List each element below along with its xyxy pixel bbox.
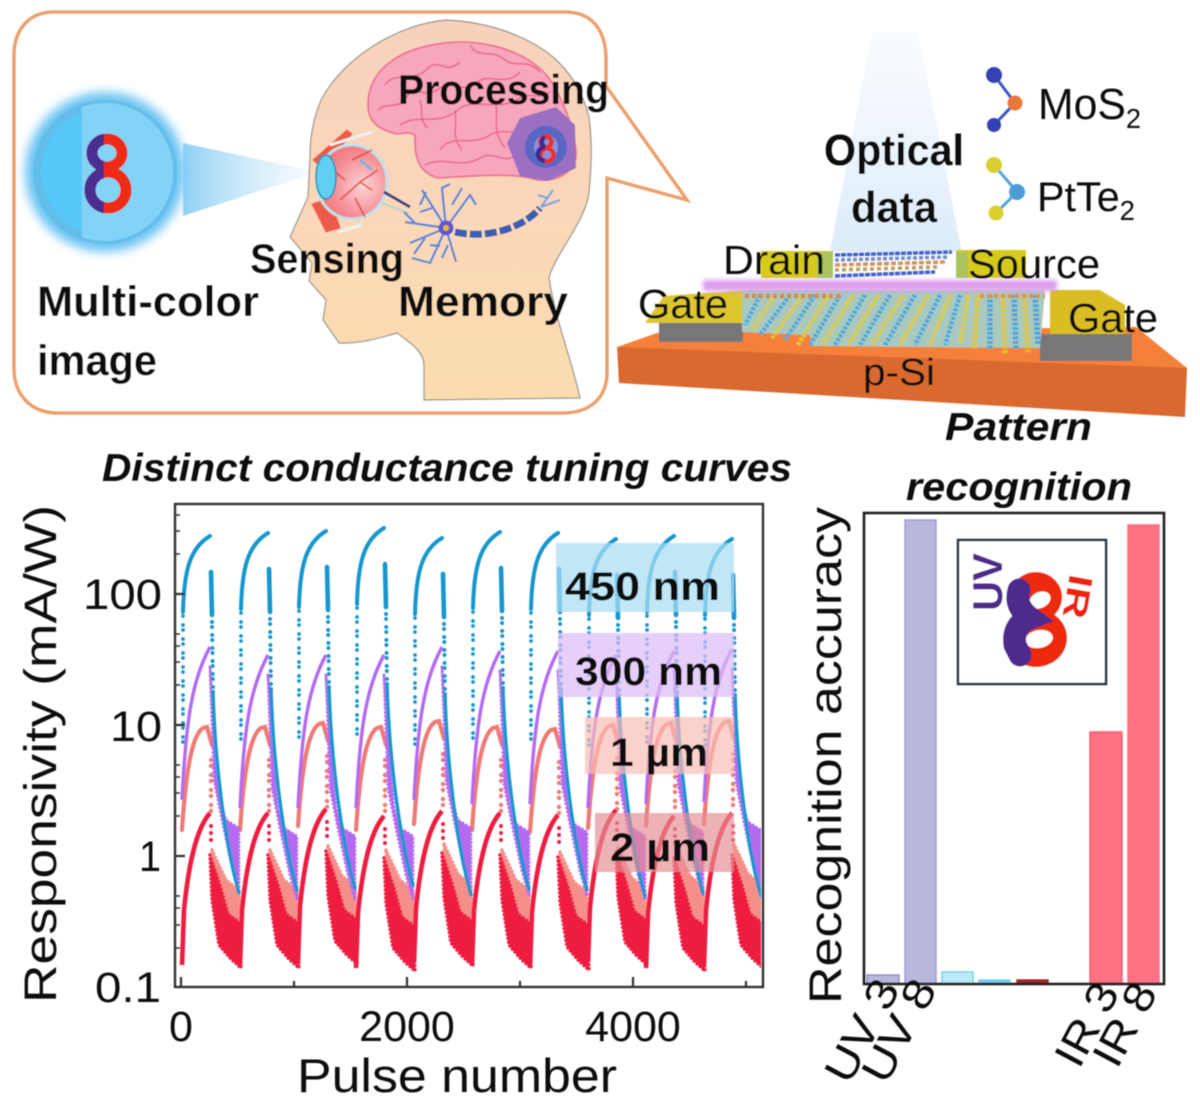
scatter series: salmon 1 um [182, 721, 763, 952]
label: Sensing: Sensing [250, 235, 404, 282]
neuron [404, 184, 560, 263]
eye [312, 130, 410, 232]
right and left gate electrodes [645, 290, 1132, 361]
illustration: human head [290, 20, 591, 400]
inset label: IR: IR [1054, 572, 1100, 622]
icon: PtTe2 molecule [986, 157, 1025, 220]
p-Si substrate [617, 327, 1187, 417]
bars [867, 520, 1159, 983]
legend: 300 nm [558, 633, 734, 697]
legend: 300 nm: 300 nm [575, 650, 722, 694]
icon: multi-color image globe [25, 92, 318, 252]
legend: 1 µm [585, 717, 734, 775]
bar tick labels: UV 8 [852, 971, 946, 1091]
label: PtTe2: PtTe [1037, 173, 1121, 220]
x tick labels [169, 1003, 681, 1051]
chart: responsivity vs pulse number [15, 504, 763, 1102]
optical data light beam [830, 32, 962, 252]
label: data: data [851, 183, 937, 232]
brain [368, 42, 576, 180]
processing area in the brain with digit 8 [507, 107, 576, 181]
light beam to the eye [183, 143, 318, 216]
y tick labels: 100 [83, 571, 162, 619]
icon: digit 8 red and purple [90, 139, 126, 208]
y tick labels: 0.1 [95, 964, 161, 1012]
drain and source electrodes [761, 250, 1026, 278]
PtTe2 channel layer [742, 290, 1045, 355]
label: p-Si: p-Si [863, 352, 935, 394]
bar tick labels: IR 8 [1083, 974, 1167, 1075]
inset label: UV: UV [964, 553, 1011, 611]
y tick labels [83, 571, 162, 1012]
label: image: image [37, 337, 157, 385]
scatter series: purple 300 nm [182, 647, 761, 900]
legend: 1 µm: 1 µm [610, 731, 708, 775]
y axis label: Recognition accuracy [800, 506, 851, 1004]
bar tick labels: UV 3 [815, 971, 909, 1091]
label: right Gate: Gate [1068, 295, 1158, 341]
x tick labels: 2000 [359, 1003, 455, 1051]
label: MoS2: MoS [1038, 80, 1128, 129]
icon: MoS2 molecule [986, 67, 1022, 132]
heading: Pattern recognition: Pattern [945, 406, 1092, 449]
panel: MoS2 PtTe2 device schematic [617, 32, 1187, 417]
y tick labels: 10 [110, 703, 162, 751]
label: Multi-color: Multi-color [37, 278, 259, 326]
legend: 450 nm [556, 543, 734, 612]
heading: Pattern recognition [906, 406, 1132, 509]
bar tick labels: IR 3 [1045, 974, 1129, 1075]
y tick labels: 1 [139, 833, 161, 881]
plot frame and axis ticks [175, 504, 763, 987]
label: Processing: Processing [398, 66, 609, 113]
label: MoS2: 2 [1126, 103, 1141, 134]
x tick labels: 4000 [585, 1003, 681, 1051]
label: Memory: Memory [398, 278, 568, 326]
scatter series: red 2 um [182, 809, 763, 971]
panel: human vision speech bubble [14, 12, 687, 413]
plot frame [864, 513, 1164, 984]
scatter series: blue 450 nm [183, 528, 761, 896]
bar tick labels [815, 971, 1167, 1091]
x tick labels: 0 [169, 1003, 193, 1051]
x axis label: Pulse number [297, 1049, 617, 1102]
chart: recognition accuracy bars [800, 506, 1167, 1091]
label: Source: Source [968, 241, 1100, 287]
dielectric purple band [703, 280, 1057, 291]
y axis label: Responsivity (mA/W) [15, 505, 66, 1003]
legend: 2 µm [595, 813, 734, 872]
label: Drain: Drain [723, 237, 825, 283]
heading: Pattern recognition: recognition [906, 466, 1132, 509]
label: PtTe2: 2 [1120, 195, 1135, 226]
label: left Gate: Gate [638, 281, 728, 327]
label: Optical: Optical [824, 126, 964, 175]
MoS2 channel layer [835, 252, 952, 276]
legend: 450 nm: 450 nm [565, 565, 720, 609]
inset: multi-color 8 [958, 540, 1106, 684]
legend: 2 µm: 2 µm [610, 826, 710, 870]
heading: Distinct conductance tuning curves: Distinct conductance tuning curves [102, 447, 792, 490]
